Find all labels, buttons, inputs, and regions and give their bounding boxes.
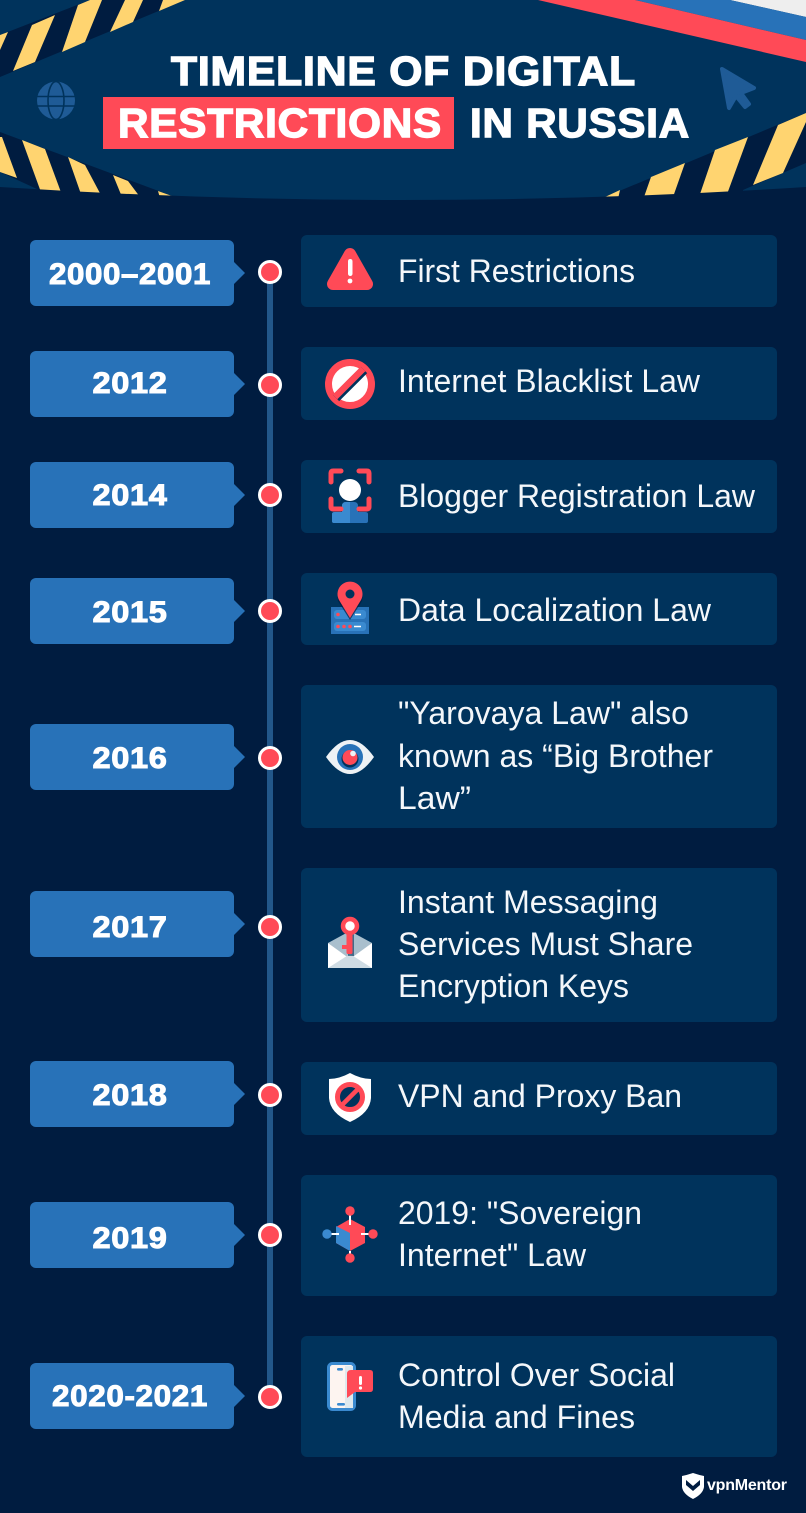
timeline dot <box>260 374 280 396</box>
card <box>301 1175 777 1296</box>
icon: globe <box>37 82 75 120</box>
label: Control Over Social <box>398 1357 675 1393</box>
label: Instant Messaging <box>398 884 658 920</box>
label: Blogger Registration Law <box>398 478 756 514</box>
timeline dot <box>260 484 280 506</box>
year tag: 2017 <box>92 911 168 944</box>
timeline dot <box>260 1386 280 1408</box>
icon: phone with alert <box>328 1364 373 1410</box>
flag stripes <box>538 0 806 62</box>
year tag <box>30 724 245 790</box>
icon: person in focus frame <box>331 471 369 523</box>
card <box>301 347 777 420</box>
title <box>103 48 690 149</box>
card <box>301 1062 777 1135</box>
year tag: 2014 <box>92 479 168 512</box>
label: VPN and Proxy Ban <box>398 1078 682 1114</box>
year tag: 2012 <box>92 367 168 400</box>
label <box>398 1357 675 1435</box>
year tag <box>30 240 245 306</box>
title: TIMELINE OF DIGITAL <box>171 48 636 94</box>
logo text: vpnMentor <box>707 1477 787 1494</box>
label: "Yarovaya Law" also <box>398 695 689 731</box>
label: Media and Fines <box>398 1399 635 1435</box>
year tag <box>30 1061 245 1127</box>
timeline line <box>267 272 273 1397</box>
timeline dot <box>260 262 280 282</box>
title: RESTRICTIONS <box>118 100 442 146</box>
vpnMentor logo <box>682 1473 787 1499</box>
title: IN RUSSIA <box>470 100 690 146</box>
highlight box <box>103 97 454 149</box>
icon: warning <box>333 254 367 284</box>
card <box>301 868 777 1022</box>
label: Internet Blacklist Law <box>398 363 701 399</box>
timeline dot <box>260 916 280 938</box>
label: First Restrictions <box>398 253 635 289</box>
year tag <box>30 891 245 957</box>
timeline dot <box>260 1224 280 1246</box>
caution tape: bottom right <box>605 113 806 205</box>
year tag <box>30 1202 245 1268</box>
row 2015 <box>30 573 777 645</box>
icon: shield with ban sign <box>329 1073 371 1122</box>
label: Data Localization Law <box>398 592 712 628</box>
card <box>301 685 777 828</box>
row 2018 <box>30 1061 777 1135</box>
timeline dot <box>260 600 280 622</box>
icon: prohibited <box>328 362 372 406</box>
header banner <box>0 0 806 215</box>
year tag <box>30 462 245 528</box>
row 2014 <box>30 460 777 533</box>
year tag: 2020-2021 <box>52 1380 208 1413</box>
label: Law” <box>398 780 471 816</box>
card <box>301 235 777 307</box>
year tag <box>30 351 245 417</box>
label <box>398 695 713 816</box>
label: Internet" Law <box>398 1237 587 1273</box>
icon: location pin on server <box>331 582 369 634</box>
label: Encryption Keys <box>398 968 629 1004</box>
year tag: 2000–2001 <box>49 258 211 291</box>
row 2012 <box>30 347 777 420</box>
row 2000–2001 <box>30 235 777 307</box>
year tag: 2015 <box>92 596 168 629</box>
timeline dot <box>260 1084 280 1106</box>
row 2019 <box>30 1175 777 1296</box>
year tag: 2018 <box>92 1079 168 1112</box>
icon: network cube <box>322 1206 378 1263</box>
icon: envelope with key <box>328 919 372 968</box>
card <box>301 573 777 645</box>
row 2020-2021 <box>30 1336 777 1457</box>
row 2016 <box>30 685 777 828</box>
label: 2019: "Sovereign <box>398 1195 642 1231</box>
year tag: 2016 <box>92 742 168 775</box>
label: Services Must Share <box>398 926 693 962</box>
icon: logo shield <box>682 1473 704 1499</box>
timeline dot <box>260 748 280 768</box>
year tag: 2019 <box>92 1222 168 1255</box>
label <box>398 1195 642 1273</box>
icon: cursor <box>722 69 754 108</box>
label: known as “Big Brother <box>398 738 713 774</box>
row 2017 <box>30 868 777 1022</box>
caution tape: top left <box>0 0 185 77</box>
card <box>301 460 777 533</box>
label <box>398 884 693 1004</box>
card <box>301 1336 777 1457</box>
year tag <box>30 578 245 644</box>
year tag <box>30 1363 245 1429</box>
icon: eye <box>326 740 374 774</box>
caution tape: bottom left <box>0 132 172 205</box>
